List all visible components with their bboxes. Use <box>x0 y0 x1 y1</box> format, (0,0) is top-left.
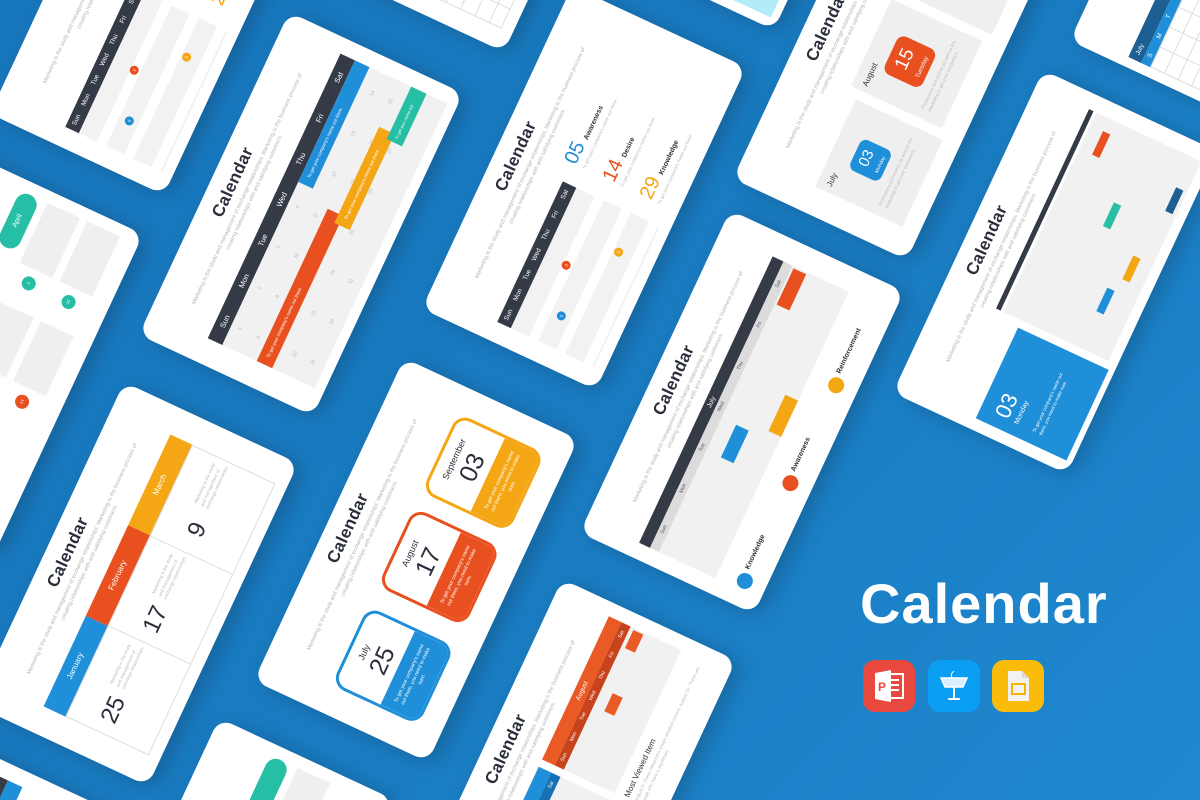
highlighted items: 14 Desire <box>598 136 636 185</box>
calendar grid: 10 <box>293 252 301 260</box>
slide description: Marketing is the study and management of exchange relationships. Marketing is the business process of creating relationships with and satisfying customers. <box>945 131 1058 363</box>
weekday row: Mon <box>678 483 688 494</box>
day header bar: Mon <box>80 93 92 107</box>
card: July 25: To get your company's name out there, you need to make sure. <box>393 643 432 706</box>
orange calendar: Tue <box>579 711 588 721</box>
column: April: 3 <box>26 281 31 285</box>
highlighted items: To get your company's name out there <box>656 134 693 205</box>
event: blue <box>0 780 22 800</box>
calendar grid: 21 <box>387 98 395 106</box>
calendar grid: 9 <box>275 294 281 299</box>
calendar grid: 15 <box>273 342 281 350</box>
slide: April columns <box>0 153 143 557</box>
highlighted items: 05 Awareness <box>560 105 605 168</box>
day header bar: Sun <box>71 113 82 127</box>
orange calendar: Thu <box>598 670 607 681</box>
slide: July with items <box>580 210 904 614</box>
box: August: Promotions and events as well as the marketing to get your company's. <box>921 40 959 112</box>
slide: date cards <box>254 358 578 762</box>
column: April: April <box>11 213 24 229</box>
slide: 05 Awareness calendar <box>422 0 746 390</box>
slide title <box>0 0 168 127</box>
weekday row: Thu <box>736 361 745 371</box>
month header strip: March <box>151 473 168 497</box>
event blocks <box>720 268 806 464</box>
slide title: Calendar <box>962 202 1011 278</box>
day header bar: Wed <box>531 247 543 262</box>
day header bar: Mon <box>236 272 251 289</box>
box: July: 03 <box>855 147 878 169</box>
weekday row: S <box>1146 52 1154 59</box>
box: July <box>815 99 943 227</box>
event: blue <box>298 60 369 189</box>
event: blue: To get your company's name out there. <box>306 106 344 179</box>
day header bar: Sat <box>332 70 345 84</box>
mini table <box>402 0 565 29</box>
calendar grid: 28 <box>405 107 413 114</box>
calendar grid: 24 <box>329 269 337 277</box>
event: red: To get your company's name out there. <box>266 286 303 358</box>
day header bar: Fri <box>551 210 560 220</box>
day header bar: Sat <box>560 189 570 201</box>
slide: January February March <box>0 382 298 786</box>
slide description: Marketing is the study and management of exchange relationships. Marketing is the business process of creating relationships with and satisfying customers. <box>191 73 304 305</box>
weekday row: Wed <box>716 401 726 413</box>
card: August 17: To get your company's name out there, you need to make sure. <box>439 544 478 607</box>
event dots: 3 <box>563 263 569 267</box>
day header bar: Mon <box>512 288 524 302</box>
slide title: Calendar <box>323 490 372 566</box>
icon: Google Slides <box>992 660 1044 712</box>
slide: 03 Monday <box>893 70 1200 474</box>
calendar grid: 19 <box>349 179 357 187</box>
day header bar <box>65 0 144 133</box>
blue date box <box>976 328 1109 460</box>
column: April: 15 <box>65 299 71 305</box>
box: August: August <box>861 61 879 88</box>
Most Viewed Item: Most Viewed Item <box>623 737 658 799</box>
card: July 25: 25 <box>364 642 401 679</box>
slide: top-left mini calendar <box>0 0 314 195</box>
icon: PowerPoint <box>863 660 915 712</box>
event: orange: To get your company's name out there. <box>343 148 381 220</box>
icon: Keynote <box>928 660 980 712</box>
month boxes: 9 <box>182 518 212 541</box>
month boxes: Marketing is the study and management of exchange relationships. <box>151 553 187 600</box>
event dots <box>556 248 624 320</box>
card: July 25 <box>331 606 455 725</box>
event: teal: To get your name out <box>394 104 414 140</box>
weekday row <box>1141 0 1200 67</box>
month boxes <box>65 445 276 755</box>
items: Knowledge, Awareness, Reinforcement: Reinforcement <box>836 327 863 375</box>
grid <box>1150 0 1200 105</box>
day header bar <box>208 54 355 345</box>
calendar grid <box>1003 112 1200 361</box>
main title: Calendar <box>860 572 1108 635</box>
icon: PowerPoint: P <box>878 680 886 694</box>
calendar header <box>996 109 1094 311</box>
blue date box: Monday <box>1013 400 1030 426</box>
weekday row: Sun <box>659 524 669 535</box>
day header bar: Thu <box>109 33 120 46</box>
highlighted items: To get your company's name out there <box>581 99 618 170</box>
calendar grid: 26 <box>367 188 375 195</box>
weekday row: Sat <box>774 279 783 289</box>
box: July: July <box>825 171 839 188</box>
orange calendar: Fri <box>608 651 616 659</box>
day header bar <box>497 181 576 328</box>
slide title: Calendar <box>208 144 257 220</box>
blue date box: 03 <box>990 389 1023 422</box>
calendar grid: 11 <box>312 212 320 219</box>
slide: Sun-Sat event calendar <box>139 12 463 416</box>
month bar <box>639 256 784 548</box>
slide: August calendars <box>412 579 736 800</box>
day header bar: Tue <box>256 232 269 248</box>
grid <box>659 266 849 578</box>
card: July 25: July <box>356 643 372 662</box>
box: August: Tuesday <box>915 56 930 79</box>
day header bar: Sun <box>218 313 231 329</box>
column: March <box>0 302 74 409</box>
orange calendar: Mon <box>569 731 578 743</box>
event dots: 5 <box>127 119 132 123</box>
day header bar: Thu <box>294 151 307 166</box>
highlighted items: 29 Knowledge <box>636 139 680 203</box>
weekday row: M <box>1155 32 1163 40</box>
month boxes: 17 <box>137 602 173 637</box>
month header strip: January <box>65 651 85 681</box>
items: Knowledge, Awareness, Reinforcement: Awareness <box>790 436 812 473</box>
calendar grid: 30 <box>328 318 336 326</box>
slide: August 15 / July 03 <box>733 0 1057 260</box>
day header bar <box>0 774 8 800</box>
month boxes: 25 <box>95 692 131 728</box>
highlighted items <box>560 99 693 205</box>
slide title: Calendar <box>491 118 540 194</box>
card: August 17 <box>377 507 501 627</box>
card: September 03: September <box>440 437 468 481</box>
orange calendar <box>542 616 681 793</box>
day header bar: Wed <box>99 52 111 67</box>
event dots: 5 <box>559 314 564 318</box>
day header bar: Wed <box>274 190 289 208</box>
card: August 17: August <box>400 539 421 568</box>
slide: top-right July <box>1070 0 1200 122</box>
card: September 03: To get your company's name out there, you need to make sure. <box>483 450 522 513</box>
slide: bottom-left <box>0 732 116 800</box>
blue calendar <box>472 767 611 800</box>
calendar grid <box>511 188 660 367</box>
calendar grid: 5 <box>313 164 320 169</box>
weekday row: Tue <box>698 443 707 453</box>
card: September 03 <box>421 413 545 532</box>
orange calendar: August <box>574 680 589 702</box>
month header strip: February <box>107 559 128 592</box>
calendar grid <box>79 0 228 172</box>
event tags <box>1092 131 1184 314</box>
calendar grid: 3 <box>275 245 282 250</box>
calendar grid: 29 <box>309 359 317 366</box>
column: April <box>0 194 120 310</box>
month bar: July <box>706 395 717 409</box>
event: orange <box>334 127 395 230</box>
calendar grid: 20 <box>368 139 376 146</box>
card: September 03: 03 <box>454 449 491 486</box>
calendar grid: 17 <box>311 261 319 268</box>
day header bar: Fri <box>313 112 325 124</box>
card: August 17: 17 <box>410 543 447 580</box>
calendar grid: 12 <box>331 171 339 179</box>
day header bar: Thu <box>541 228 552 241</box>
weekday row: Fri <box>755 321 763 329</box>
calendar grid: 7 <box>351 82 358 87</box>
event dots: 9 <box>616 250 621 254</box>
slide title <box>1080 0 1200 54</box>
month header strip <box>44 434 192 717</box>
calendar grid: 13 <box>350 130 358 138</box>
blue date box: To get your company's name out there, you need to make sure. <box>1032 372 1067 436</box>
month boxes: Marketing is the study and management of exchange relationships. <box>193 462 229 510</box>
slide: top mini table <box>330 0 654 52</box>
cyan block <box>711 0 805 17</box>
calendar grid: 1 <box>237 326 244 331</box>
month bar <box>1128 0 1200 63</box>
calendar grid: 27 <box>386 147 394 155</box>
weekday row: T <box>1164 13 1172 20</box>
day header bar: Sun <box>503 308 514 322</box>
box: July: Promotions and events as well as the marketing to get your company's. <box>878 137 916 209</box>
box: August: 15 <box>891 45 919 73</box>
items: Knowledge, Awareness, Reinforcement <box>736 327 863 589</box>
month bar: July <box>1134 43 1145 56</box>
weekday row <box>650 261 793 552</box>
calendar grid: 6 <box>332 123 339 128</box>
gray box <box>270 768 330 800</box>
calendar grid: 25 <box>348 229 356 236</box>
teal header pill <box>246 755 290 800</box>
slide description: Marketing is the study and management of exchange relationships. Marketing is the business process of creating relationships with and satisfying customers. <box>632 271 745 503</box>
calendar grid: 8 <box>256 335 262 340</box>
calendar grid: 4 <box>294 204 301 209</box>
calendar grid <box>222 60 447 388</box>
box: third <box>905 0 1032 35</box>
calendar grid: 18 <box>330 220 338 228</box>
day header bar: Tue <box>90 73 101 86</box>
slide description: Marketing is the study and management of exchange relationships. Marketing is the business process of creating relationships with and satisfying customers. <box>26 443 139 675</box>
orange calendar: Sat <box>617 630 626 639</box>
items: Knowledge, Awareness, Reinforcement: Knowledge <box>744 534 767 571</box>
month boxes: Marketing is the study and management of exchange relationships. <box>109 643 145 690</box>
event dots <box>124 52 192 126</box>
orange calendar: Wed <box>588 690 598 702</box>
box: July: Monday <box>874 156 887 174</box>
blue calendar: Sat <box>547 780 555 790</box>
calendar grid: 2 <box>256 286 263 291</box>
slide description: Marketing is the study and management of exchange relationships. Marketing is the business process of creating relationships with and satisfying customers. <box>474 47 587 279</box>
day header bar: Fri <box>119 15 128 25</box>
calendar grid: 31 <box>347 278 355 285</box>
highlighted items: To get your company's name out there <box>619 116 656 188</box>
event: teal <box>387 87 427 146</box>
event dots: 3 <box>131 68 137 72</box>
calendar grid: 22 <box>291 350 299 358</box>
event dots: 9 <box>184 55 189 59</box>
slide title: Calendar <box>481 711 530 787</box>
column: March: 14 <box>18 398 25 405</box>
slide: bottom teal <box>69 718 393 800</box>
slide title <box>79 723 247 800</box>
slide title: Calendar <box>649 342 698 418</box>
slide: top cyan <box>600 0 924 30</box>
calendar grid: 23 <box>310 310 318 317</box>
slide title: Calendar <box>43 514 92 590</box>
day header bar: Tue <box>522 268 533 281</box>
calendar grid: 14 <box>369 90 377 97</box>
calendar grid: 16 <box>292 301 300 309</box>
orange calendar: Sun <box>559 752 569 763</box>
slide description: Marketing is the study and management of exchange relationships. Marketing is the business process of creating relationships with and satisfying customers. <box>306 419 419 651</box>
event: red <box>257 209 343 368</box>
box: August <box>851 0 982 128</box>
